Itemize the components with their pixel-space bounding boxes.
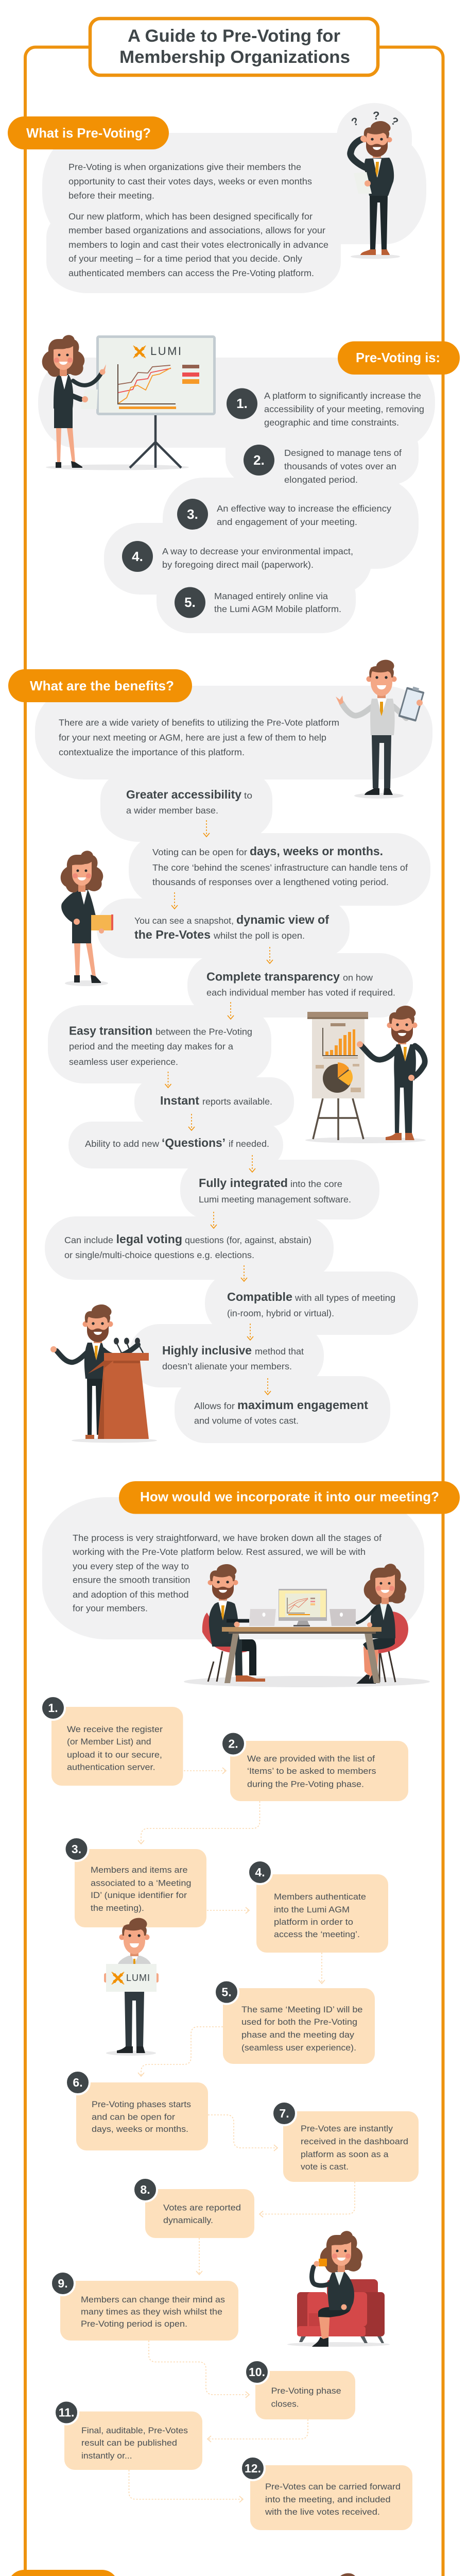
step 3: 3.	[72, 1842, 81, 1856]
step 12: with the live votes received.	[265, 2507, 380, 2517]
benefit: days, weeks or months: days, weeks or months.	[250, 844, 383, 858]
heading pill	[8, 116, 169, 149]
illustration: two men shaking hands	[319, 2573, 425, 2576]
illustration: man holding Lumi sign	[104, 1918, 159, 2056]
sign: LUMI	[126, 1973, 150, 1983]
arrow	[165, 1072, 171, 1088]
intro text	[59, 717, 339, 757]
body text: Pre-Voting is when organizations give their members the	[68, 162, 301, 172]
illustration: man at podium	[50, 1304, 157, 1443]
benefit: highly inclusive	[162, 1344, 304, 1371]
illustration: confused man: ?	[373, 109, 379, 122]
panel backgrounds	[35, 686, 432, 1443]
illustration: woman with folder	[61, 851, 113, 986]
step 10: closes.	[271, 2399, 299, 2409]
woman presenter	[42, 335, 106, 468]
illustration: man with easel	[305, 1006, 426, 1143]
benefit: questions: if needed.	[229, 1139, 269, 1149]
benefit: dynamic view	[134, 913, 329, 941]
step 12: into the meeting, and included	[265, 2495, 391, 2504]
item 1: A platform to significantly increase the	[264, 391, 421, 401]
item 1: geographic and time constraints.	[264, 417, 399, 428]
step 12	[241, 2456, 412, 2530]
step 2	[221, 1732, 408, 1801]
monitor	[279, 1589, 327, 1626]
step 1: authentication server.	[67, 1762, 155, 1772]
step 6	[66, 2071, 208, 2150]
title box	[90, 19, 378, 75]
benefit: legal voting: legal voting	[116, 1232, 182, 1246]
arrow	[247, 1324, 253, 1340]
step 8: dynamically.	[163, 2215, 213, 2225]
item 5: the Lumi AGM Mobile platform.	[214, 604, 341, 614]
item 5: 5.	[184, 595, 196, 610]
step 3: associated to a ‘Meeting	[91, 1878, 192, 1888]
benefit: questions: Ability to add new	[85, 1139, 159, 1149]
benefit: compatible: with all types of meeting	[294, 1293, 395, 1303]
benefit: easy transition: between the Pre-Voting	[155, 1026, 252, 1037]
heading pill	[8, 2570, 118, 2576]
benefit: days, weeks or months	[152, 844, 408, 887]
benefit: dynamic view: dynamic view of	[236, 913, 329, 926]
step 5: The same ‘Meeting ID’ will be	[241, 2005, 362, 2014]
illustration: confused man: ?	[389, 115, 400, 128]
item 2: 2.	[253, 452, 265, 468]
step 2: during the Pre-Voting phase.	[247, 1780, 364, 1789]
step 6: and can be open for	[92, 2112, 175, 2122]
step 11: result can be published	[81, 2438, 177, 2448]
benefit: fully integrated: Fully integrated	[199, 1176, 288, 1190]
easel	[307, 1012, 368, 1140]
step 2: ‘Items’ to be asked to members	[247, 1766, 376, 1776]
benefit: instant: Instant	[160, 1094, 199, 1107]
step 7: Pre-Votes are instantly	[301, 2124, 393, 2133]
illustration: man with clipboard	[336, 660, 425, 799]
step 5: 5.	[221, 1986, 232, 1999]
item 2: Designed to manage tens of	[284, 448, 402, 458]
benefit: easy transition: seamless user experience.	[69, 1057, 178, 1067]
item 4: 4.	[132, 549, 143, 564]
panel: what is pre-voting	[8, 103, 426, 293]
step 10: 10.	[249, 2365, 265, 2379]
body text: you every step of the way to	[73, 1561, 189, 1571]
benefit: dynamic view: You can see a snapshot,	[134, 916, 234, 926]
body text: before their meeting.	[68, 191, 154, 201]
sign	[106, 1964, 157, 1992]
benefit: legal voting	[64, 1232, 311, 1260]
woman seated	[356, 1564, 408, 1684]
step 3: ID’ (unique identifier for	[91, 1890, 187, 1900]
item 1	[227, 388, 424, 428]
step 4: access the ‘meeting’.	[274, 1929, 360, 1939]
step 7: 7.	[279, 2107, 289, 2120]
body text	[68, 162, 328, 278]
item 1: accessibility of your meeting, removing	[264, 404, 424, 414]
panel: pre-voting is	[38, 335, 460, 633]
benefit: questions: ‘Questions’	[162, 1136, 226, 1149]
item 3: and engagement of your meeting.	[217, 517, 357, 527]
benefit: dynamic view: the Pre-Votes	[134, 928, 211, 941]
step 4: Members authenticate	[274, 1892, 366, 1902]
benefit: legal voting: questions (for, against, abstain)	[185, 1235, 311, 1245]
body text: of your meeting – for a time period that you decide. Only	[68, 253, 302, 264]
panel background	[42, 1497, 424, 1639]
item 3: 3.	[187, 506, 198, 522]
benefit: fully integrated: into the core	[290, 1179, 342, 1189]
step 8: 8.	[140, 2183, 150, 2196]
benefit: maximum engagement: maximum engagement	[237, 1398, 368, 1412]
heading pill: Pre-Voting is:	[356, 350, 440, 365]
man seated	[202, 1564, 265, 1682]
connectors	[129, 1768, 355, 2502]
benefit: highly inclusive: Highly inclusive	[162, 1344, 252, 1357]
benefit: greater accessibility: a wider member base.	[126, 805, 218, 816]
benefit: complete transparency	[206, 970, 395, 997]
benefit: maximum engagement	[194, 1398, 368, 1426]
benefit: easy transition: Easy transition	[69, 1024, 152, 1038]
intro text: There are a wide variety of benefits to utilizing the Pre-Vote platform	[59, 717, 339, 727]
list items	[122, 388, 424, 618]
body text: working with the Pre-Vote platform below. Rest assured, we will be with	[72, 1547, 366, 1557]
step 2: We are provided with the list of	[247, 1754, 375, 1764]
arrow	[203, 820, 210, 837]
podium	[88, 1353, 149, 1439]
arrow	[241, 1265, 247, 1281]
step 9: Pre-Voting period is open.	[81, 2319, 187, 2329]
item 2: thousands of votes over an	[284, 461, 396, 471]
benefit: fully integrated: Lumi meeting management software.	[199, 1194, 351, 1205]
benefit: easy transition: period and the meeting day makes for a	[69, 1041, 233, 1052]
intro text: contextualize the importance of this platform.	[59, 747, 245, 757]
item 5	[175, 587, 341, 618]
step 11	[55, 2401, 202, 2470]
step 1: 1.	[48, 1701, 58, 1715]
intro text: for your next meeting or AGM, here are just a few of them to help	[59, 733, 326, 743]
presentation board: LUMI	[150, 345, 181, 358]
item 2	[244, 445, 402, 485]
body text: opportunity to cast their votes days, weeks or even months	[68, 176, 312, 187]
heading pill	[119, 1481, 460, 1514]
heading pill: How would we incorporate it into our meeting?	[140, 1489, 439, 1504]
step 7: received in the dashboard	[301, 2137, 408, 2146]
illustration: woman on armchair	[287, 2231, 390, 2347]
heading pill	[8, 669, 192, 702]
step 7: platform as soon as a	[301, 2149, 389, 2159]
benefit: maximum engagement: and volume of votes cast.	[194, 1416, 299, 1426]
body text: member based organizations and associations, allows for your	[68, 225, 325, 235]
benefit: fully integrated	[199, 1176, 351, 1205]
panel: process steps	[41, 1696, 419, 2530]
table	[222, 1627, 382, 1683]
illustration: confused man: ?	[350, 115, 360, 129]
step 8	[133, 2178, 254, 2238]
body text: ensure the smooth transition	[73, 1574, 190, 1585]
left man	[328, 2573, 363, 2576]
step 11: instantly or...	[81, 2451, 132, 2461]
step 5: (seamless user experience).	[241, 2043, 356, 2053]
step 3: the meeting).	[91, 1903, 144, 1913]
step 4: platform in order to	[274, 1917, 353, 1927]
item 5: Managed entirely online via	[214, 591, 328, 601]
step 6: 6.	[73, 2076, 83, 2089]
title: Membership Organizations	[119, 47, 350, 67]
item 2: elongated period.	[284, 474, 358, 485]
body text	[72, 1533, 382, 1614]
benefit: highly inclusive: method that	[255, 1346, 304, 1357]
item 1: 1.	[236, 396, 248, 411]
microphones	[114, 1337, 143, 1353]
benefit: instant	[160, 1094, 272, 1107]
arrow	[188, 1114, 195, 1130]
item 3: An effective way to increase the efficiency	[217, 503, 391, 514]
step 10	[245, 2360, 355, 2419]
step 3	[65, 1837, 206, 1927]
presentation board	[98, 337, 214, 468]
panel background	[42, 103, 426, 293]
step 1	[41, 1696, 183, 1786]
arrow	[211, 1212, 217, 1228]
step 11: 11.	[59, 2406, 74, 2419]
title	[119, 26, 350, 67]
step 12: 12.	[245, 2462, 261, 2475]
benefit: days, weeks or months: thousands of responses over a lengthened voting period.	[152, 877, 389, 887]
step 9	[51, 2272, 238, 2341]
benefit: compatible: (in-room, hybrid or virtual).	[227, 1308, 334, 1318]
step 5: used for both the Pre-Voting	[241, 2017, 357, 2027]
benefit: greater accessibility: to	[244, 790, 252, 801]
benefit: legal voting: Can include	[64, 1235, 113, 1245]
step 1: We receive the register	[67, 1724, 163, 1734]
item 3	[177, 499, 391, 530]
laptops	[249, 1609, 356, 1626]
benefit: days, weeks or months: Voting can be open for	[152, 847, 247, 857]
step 4: into the Lumi AGM	[274, 1905, 350, 1914]
step 4	[248, 1860, 388, 1953]
panel: interested	[8, 2570, 425, 2576]
arrow	[228, 1002, 234, 1019]
heading pill: What are the benefits?	[30, 678, 174, 693]
benefit: dynamic view: whilst the poll is open.	[213, 930, 305, 941]
benefit: legal voting: or single/multi-choice questions e.g. elections.	[64, 1250, 254, 1260]
step 12: Pre-Votes can be carried forward	[265, 2482, 401, 2492]
step 10: Pre-Voting phase	[271, 2386, 341, 2396]
benefit: instant: reports available.	[202, 1096, 272, 1107]
benefit: highly inclusive: doesn’t alienate your members.	[162, 1361, 292, 1371]
benefit: compatible	[227, 1290, 395, 1318]
item 4: by foregoing direct mail (paperwork).	[162, 560, 314, 570]
title: A Guide to Pre-Voting for	[128, 26, 340, 46]
illustration: presenter with board	[42, 335, 215, 470]
panel: how would we incorporate it	[42, 1481, 460, 1687]
body text: Our new platform, which has been designed specifically for	[68, 211, 313, 222]
item 4	[122, 541, 353, 572]
panel: benefits	[8, 660, 432, 1443]
step 2: 2.	[228, 1737, 238, 1751]
arrow	[267, 947, 273, 963]
step 9: Members can change their mind as	[81, 2295, 225, 2304]
body text: members to login and cast their votes electronically in advance	[68, 240, 328, 250]
arrow	[249, 1155, 255, 1172]
step 4: 4.	[255, 1866, 265, 1879]
benefit: questions	[85, 1136, 269, 1149]
step 6: Pre-Voting phases starts	[92, 2099, 191, 2109]
benefit: greater accessibility: Greater accessibility	[126, 788, 241, 801]
benefit: maximum engagement: Allows for	[194, 1401, 235, 1411]
step 7: vote is cast.	[301, 2162, 349, 2172]
body text: and adoption of this method	[73, 1589, 189, 1600]
body text: authenticated members can access the Pre-Voting platform.	[68, 268, 314, 278]
illustration: meeting	[184, 1564, 430, 1687]
presenting man	[357, 1006, 425, 1140]
benefit: compatible: Compatible	[227, 1290, 292, 1303]
benefit: greater accessibility	[126, 788, 252, 816]
step 7	[272, 2102, 419, 2182]
item 4: A way to decrease your environmental impact,	[162, 546, 353, 556]
step 8: Votes are reported	[163, 2203, 241, 2213]
step 1: upload it to our secure,	[67, 1750, 162, 1760]
arrow	[171, 892, 178, 909]
step 5	[215, 1980, 375, 2064]
heading pill	[338, 341, 460, 375]
step 3: Members and items are	[91, 1865, 187, 1875]
benefit: complete transparency: each individual member has voted if required.	[206, 987, 395, 997]
benefit: complete transparency: Complete transparency	[206, 970, 340, 983]
illustration: confused man	[350, 109, 400, 259]
step 1: (or Member List) and	[67, 1737, 151, 1747]
step 9: many times as they wish whilst the	[81, 2307, 222, 2316]
step 11: Final, auditable, Pre-Votes	[81, 2426, 188, 2435]
panel background	[38, 358, 435, 633]
benefit: easy transition	[69, 1024, 252, 1067]
body text: The process is very straightforward, we have broken down all the stages of	[73, 1533, 382, 1543]
heading pill: What is Pre-Voting?	[26, 125, 151, 141]
arrow	[265, 1378, 271, 1395]
step 5: phase and the meeting day	[241, 2030, 355, 2040]
benefit: days, weeks or months: The core ‘behind the scenes’ infrastructure can handle tens of	[152, 862, 408, 873]
step 6: days, weeks or months.	[92, 2124, 188, 2134]
benefit: complete transparency: on how	[343, 973, 373, 983]
step 9: 9.	[58, 2277, 68, 2290]
body text: for your members.	[73, 1603, 148, 1614]
